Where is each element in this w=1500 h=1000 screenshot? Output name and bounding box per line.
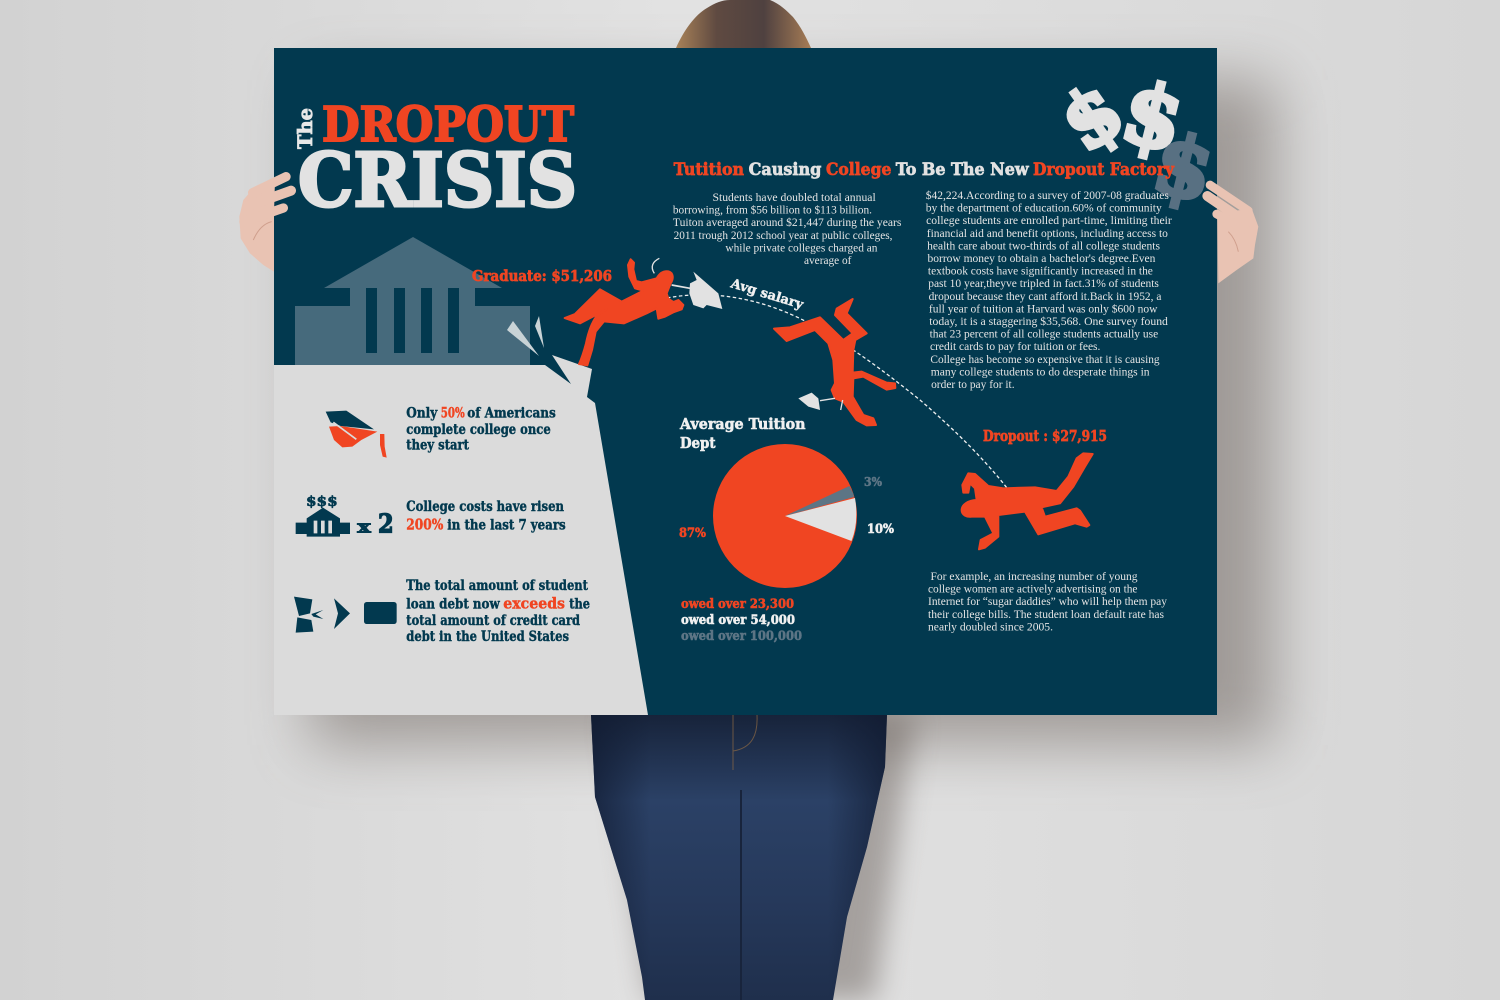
- fact 2 text: College costs have risen: [406, 499, 564, 515]
- poster panel: [274, 48, 1217, 715]
- icon: college cost times two: 2: [378, 510, 394, 540]
- body text: right column: order to pay for it.: [931, 378, 1015, 391]
- poster shadow: [310, 80, 1275, 745]
- title: The: [293, 108, 317, 149]
- body text: right column: by the department of education.60% of community: [926, 202, 1162, 215]
- body text: left column: Tuiton averaged around $21,447 during the years: [673, 216, 902, 229]
- pie legend: [681, 597, 802, 644]
- salary trajectory: dashed arc: [667, 295, 1007, 488]
- body text: right column: textbook costs have significantly increased in the: [928, 265, 1153, 278]
- body text: right column: College has become so expensive that it is causing: [930, 353, 1160, 366]
- fact 2 text: [406, 499, 566, 534]
- figure: dropout falling: [962, 453, 1093, 549]
- body text: right column: past 10 year,theyve tripled in fact.31% of students: [928, 277, 1159, 290]
- title: [293, 97, 577, 224]
- fact 1 text: complete college once: [406, 422, 551, 438]
- headline: Dropout Factory: [1033, 160, 1175, 180]
- body text: lower paragraph: nearly doubled since 2005.: [928, 620, 1053, 633]
- fact 1 text: Only: [406, 405, 438, 421]
- dollar signs: $: [1113, 61, 1193, 171]
- body text: lower paragraph: Internet for “sugar daddies” who will help them pay: [928, 595, 1167, 608]
- headline: Tutition: [674, 160, 744, 180]
- body text: left column: while private colleges charged an: [725, 241, 878, 254]
- fact 1 text: 50%: [441, 405, 465, 421]
- body text: lower paragraph: [928, 570, 1167, 633]
- building silhouette: [295, 237, 530, 365]
- graduate salary label: Graduate: $51,206: [472, 268, 612, 285]
- body text: left column: Students have doubled total annual: [712, 191, 876, 204]
- figure: mid fall: [774, 299, 895, 425]
- pie chart: [713, 444, 857, 588]
- person shadow: [610, 715, 915, 1000]
- person: jeans: [591, 715, 887, 1000]
- fact 1 text: of Americans: [467, 405, 556, 421]
- fact 1 text: they start: [406, 437, 470, 453]
- fact 2 text: 200%: [406, 516, 443, 534]
- body text: right column: [926, 189, 1172, 391]
- body text: right column: financial aid and benefit options, including access to: [927, 227, 1168, 240]
- body text: right column: college students are enrolled part-time, limiting their: [926, 214, 1172, 227]
- headline: To Be The New: [896, 160, 1029, 180]
- fact 3 text: exceeds: [503, 594, 565, 612]
- body text: lower paragraph: college women are actively advertising on the: [928, 583, 1138, 596]
- left hand: [239, 177, 291, 272]
- icon: graduation cap: [326, 411, 387, 458]
- right hand: [1207, 185, 1258, 283]
- fact 2 text: in the last 7 years: [447, 518, 566, 534]
- pie labels: 87%: [679, 526, 707, 541]
- pie legend: owed over 54,000: [681, 613, 795, 628]
- dollar signs: $: [1045, 66, 1139, 169]
- headline: Causing: [749, 160, 822, 180]
- body text: right column: today, it is a staggering $35,568. One survey found: [929, 315, 1168, 328]
- headline: College: [826, 160, 892, 180]
- headline: [674, 160, 1175, 180]
- body text: right column: dropout because they cant afford it.Back in 1952, a: [929, 290, 1161, 303]
- title: CRISIS: [298, 138, 577, 224]
- fact 3 text: The total amount of student: [406, 578, 589, 594]
- person: hair: [676, 0, 811, 48]
- avg salary label: Avg salary: [728, 276, 805, 313]
- fact 1 text: [406, 405, 556, 453]
- body text: right column: $42,224.According to a survey of 2007-08 graduates: [926, 189, 1169, 202]
- pie labels: 3%: [864, 474, 882, 489]
- fact 3 text: total amount of credit card: [406, 613, 580, 629]
- icon: college cost times two: $$$: [306, 494, 338, 510]
- fact 3 text: debt in the United States: [406, 629, 569, 645]
- pie legend: owed over 100,000: [681, 629, 802, 644]
- fact 3 text: [406, 578, 590, 645]
- body text: right column: many college students to do desperate things in: [931, 365, 1150, 378]
- title: DROPOUT: [322, 97, 574, 153]
- dropout salary label: Dropout : $27,915: [983, 428, 1107, 445]
- dollar signs: [1045, 61, 1223, 221]
- figure: graduate falling: [565, 258, 722, 365]
- icon: torn loan to credit card: [294, 597, 397, 633]
- body text: left column: 2011 trough 2012 school year at public colleges,: [674, 229, 893, 242]
- body text: lower paragraph: their college bills. The student loan default rate has: [928, 608, 1164, 621]
- body text: right column: credit cards to pay for tuition or fees.: [930, 340, 1100, 353]
- icon: college cost times two: [296, 494, 394, 540]
- fact 3 text: loan debt now: [406, 596, 500, 612]
- body text: left column: [673, 191, 902, 267]
- pie labels: 10%: [867, 522, 895, 537]
- pie labels: [679, 474, 895, 541]
- body text: right column: health care about two-thirds of all college students: [927, 239, 1160, 252]
- chart heading: [679, 415, 806, 452]
- fact 3 text: the: [569, 596, 590, 612]
- body text: right column: that 23 percent of all college students actually use: [930, 328, 1158, 341]
- cliff panel: [274, 355, 648, 715]
- chart heading: Dept: [680, 434, 716, 452]
- body text: right column: full year of tuition at Harvard was only $600 now: [929, 302, 1158, 315]
- body text: left column: borrowing, from $56 billion to $113 billion.: [673, 204, 872, 217]
- cliff shards: [507, 316, 544, 356]
- body text: left column: average of: [804, 254, 852, 267]
- body text: right column: borrow money to obtain a bachelor's degree.Even: [928, 252, 1156, 265]
- pie legend: owed over 23,300: [681, 597, 794, 612]
- chart heading: Average Tuition: [679, 415, 806, 433]
- body text: lower paragraph: For example, an increasing number of young: [930, 570, 1138, 583]
- icon: college cost times two: x: [357, 517, 372, 537]
- dollar signs: $: [1144, 114, 1223, 221]
